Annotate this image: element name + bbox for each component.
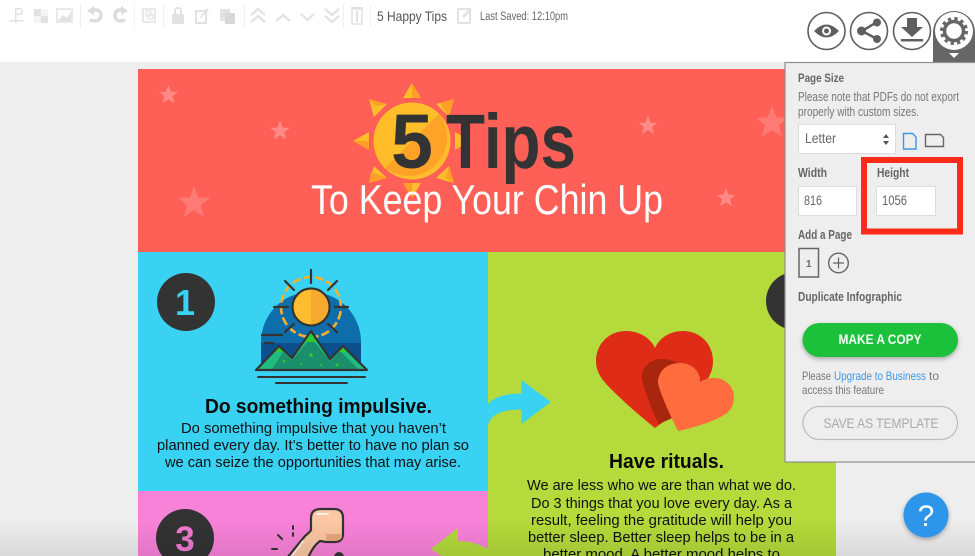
width field: Width [798, 166, 827, 180]
tip 1 panel [138, 252, 488, 491]
tip 2 body: result, feeling the gratitude will help you [531, 512, 792, 529]
tip 1 body [157, 420, 469, 471]
upgrade note: to [929, 369, 939, 383]
tip 1 body: we can seize the opportunities that may arise. [164, 454, 461, 471]
tip 2 body: better sleep. Better sleep helps to be in a [528, 529, 795, 546]
number badge 1: 1 [175, 282, 195, 323]
icon: landscape page [926, 134, 944, 146]
page thumbnail [799, 248, 818, 277]
tip 2 body: We are less who we are than what we do. [527, 477, 796, 494]
top toolbar [0, 0, 975, 62]
height field: 1056 [882, 192, 907, 208]
tip 1 body: Do something impulsive that you haven’t [181, 420, 447, 437]
icon: download [894, 12, 930, 50]
icon: preview eye [808, 12, 845, 50]
tip 2 panel [488, 252, 836, 556]
make a copy button: MAKE A COPY [838, 331, 922, 347]
add a page heading: Add a Page [798, 228, 852, 242]
duplicate heading: Duplicate Infographic [798, 290, 902, 304]
width field: 816 [804, 192, 822, 208]
upgrade note: Upgrade to Business [834, 369, 926, 383]
number badge 2 [766, 272, 824, 330]
title: 5 Tips: Tips [446, 99, 576, 185]
save as template button: SAVE AS TEMPLATE [824, 415, 938, 431]
subtitle: To Keep Your Chin Up [311, 176, 663, 223]
icon: sun [353, 83, 471, 198]
settings tab [933, 11, 975, 62]
pdf note [798, 90, 959, 119]
tip 1 heading: Do something impulsive. [205, 396, 432, 418]
page thumbnail: 1 [806, 259, 812, 270]
tip 1 body: planned every day. It’s better to have no plan so [157, 437, 469, 454]
page size heading: Page Size [798, 71, 844, 85]
help button [904, 492, 948, 538]
height field: Height [877, 166, 910, 180]
make a copy button [802, 323, 958, 357]
number badge 3 [156, 509, 214, 556]
icon: sun over mountains [256, 270, 367, 383]
width field [798, 166, 856, 216]
pdf note: properly with custom sizes. [798, 105, 919, 119]
tip 3 panel [138, 491, 488, 556]
upgrade note [802, 369, 939, 397]
arrow: tip 2 to tip 3 [431, 528, 488, 556]
icon: share [850, 12, 888, 50]
icon: flexed arm [272, 509, 344, 556]
number badge 1 [157, 273, 215, 331]
icon: portrait page [904, 134, 916, 149]
page size select [798, 124, 896, 154]
icon: settings gear [935, 12, 973, 58]
document name: 5 Happy Tips [377, 8, 447, 24]
tip 2 body [527, 477, 796, 556]
tip 2 body: Do 3 things that you love every day. As a [531, 495, 793, 512]
icon: hearts [596, 331, 734, 431]
arrow: tip 1 to tip 2 [488, 381, 550, 424]
tip 2 heading: Have rituals. [609, 451, 724, 473]
toolbar icons [9, 4, 472, 28]
title: 5 Tips: 5 [391, 99, 433, 185]
title: 5 Tips [391, 99, 576, 185]
settings panel [785, 62, 975, 462]
page size select: Letter [805, 130, 836, 146]
icon: add page [829, 253, 848, 273]
infographic header panel [138, 69, 788, 252]
height field [876, 166, 936, 216]
upgrade note: access this feature [802, 383, 884, 397]
header stars [159, 85, 788, 217]
save as template button [803, 406, 958, 440]
upgrade note: Please [802, 369, 831, 383]
highlight box: height [864, 160, 960, 232]
help button: ? [918, 500, 934, 533]
last saved: Last Saved: 12:10pm [480, 11, 568, 23]
